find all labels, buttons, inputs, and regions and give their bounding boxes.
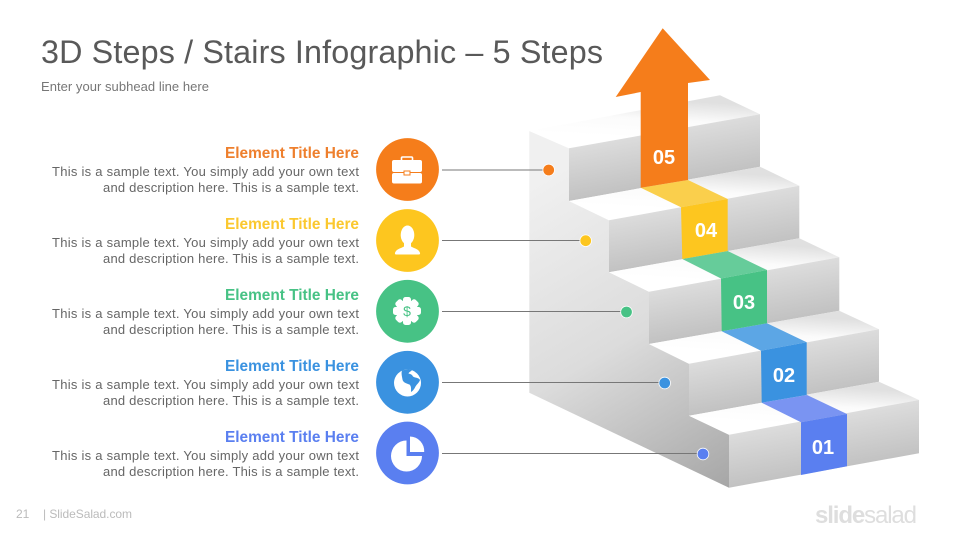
3D staircase: [529, 95, 919, 488]
text block 03: [52, 287, 359, 337]
text block 01: [52, 429, 359, 479]
text block 02: [52, 358, 359, 408]
text block 05: [52, 145, 359, 195]
text block 01: Element Title Here: [225, 429, 359, 446]
text block 03: and description here. This is a sample text.: [103, 322, 359, 337]
text block 02: Element Title Here: [225, 358, 359, 375]
text block 05: and description here. This is a sample text.: [103, 180, 359, 195]
text block 05: This is a sample text. You simply add your own text: [52, 164, 359, 179]
step 1 block: [689, 382, 919, 488]
connector 01: [442, 448, 709, 460]
colored strip step 02: 02: [773, 365, 795, 387]
icon: person: [376, 209, 439, 272]
arrow step 05: [616, 28, 710, 188]
footer page number: 21: [16, 507, 30, 521]
text block 04: and description here. This is a sample text.: [103, 251, 359, 266]
step 4 block: [569, 167, 799, 272]
text block 03: This is a sample text. You simply add your own text: [52, 306, 359, 321]
staircase side wall: [529, 131, 729, 488]
connector 02: [442, 377, 670, 389]
icon: gear with dollar: $: [403, 303, 411, 319]
colored strip step 04: [641, 180, 728, 259]
step 3 block: [609, 238, 839, 344]
subhead: Enter your subhead line here: [41, 79, 209, 94]
text block 01: This is a sample text. You simply add your own text: [52, 448, 359, 463]
text block 02: and description here. This is a sample text.: [103, 393, 359, 408]
connector 04: [442, 235, 592, 246]
icon: gear with dollar: [376, 280, 439, 343]
text block 05: Element Title Here: [225, 145, 359, 162]
text block 03: Element Title Here: [225, 287, 359, 304]
logo: slidesalad: [815, 502, 917, 529]
arrow step 05: 05: [653, 147, 675, 169]
text block 04: This is a sample text. You simply add your own text: [52, 235, 359, 250]
text block 02: This is a sample text. You simply add your own text: [52, 377, 359, 392]
text block 04: [52, 216, 359, 266]
connector 05: [442, 164, 554, 176]
text block 01: and description here. This is a sample text.: [103, 464, 359, 479]
colored strip step 03: [682, 251, 767, 331]
icon: pie chart: [376, 422, 439, 484]
footer site name: | SlideSalad.com: [43, 507, 132, 521]
colored strip step 04: 04: [695, 220, 718, 242]
connector 03: [442, 306, 632, 318]
step 5 block: [529, 95, 760, 201]
colored strip step 01: [762, 395, 847, 475]
colored strip step 01: 01: [812, 437, 834, 459]
colored strip step 03: 03: [733, 292, 755, 314]
text block 04: Element Title Here: [225, 216, 359, 233]
icon: globe: [376, 351, 439, 414]
colored strip step 02: [722, 323, 807, 403]
step 2 block: [649, 311, 879, 416]
title: 3D Steps / Stairs Infographic – 5 Steps: [41, 34, 603, 70]
icon: briefcase: [376, 138, 439, 201]
